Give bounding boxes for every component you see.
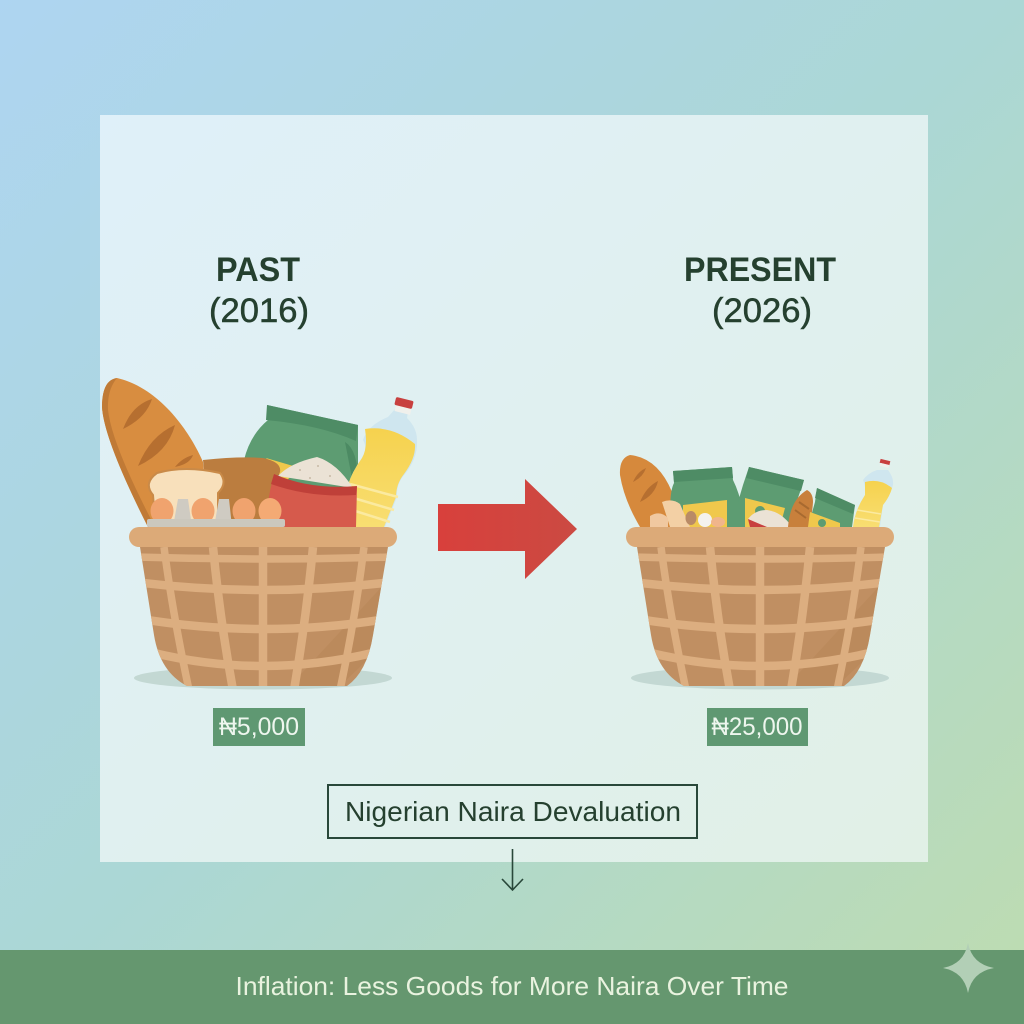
icon: small baguette xyxy=(620,455,676,527)
footer band xyxy=(0,950,1024,1024)
heading: past: (2016) xyxy=(209,292,309,330)
icon: baguette xyxy=(102,378,210,527)
heading: present: PRESENT xyxy=(684,251,836,289)
price badge: past: ₦5,000 xyxy=(219,713,299,741)
callout: naira devaluation xyxy=(328,785,697,838)
icon: bottle xyxy=(348,397,417,527)
icon: green bag one xyxy=(670,467,744,527)
heading: present xyxy=(684,251,836,330)
icon: bread roll xyxy=(788,490,813,527)
icon: basket xyxy=(626,527,894,690)
icon: assorted small items xyxy=(650,500,725,527)
price badge: present: ₦25,000 xyxy=(712,713,802,741)
icon: green bag xyxy=(244,405,358,500)
heading: present: (2026) xyxy=(712,292,812,330)
panel: comparison xyxy=(100,115,928,862)
icon: green bag two xyxy=(738,467,804,527)
footer band: Inflation: Less Goods for More Naira Over Time xyxy=(236,971,788,1001)
icon: small bottle xyxy=(853,459,893,527)
icon: green bag three xyxy=(808,488,855,527)
heading: past: PAST xyxy=(216,251,300,289)
arrow: past to present xyxy=(438,479,577,579)
past basket xyxy=(102,378,417,690)
icon: egg tray xyxy=(147,498,285,527)
icon: rice sack xyxy=(267,457,357,527)
icon: sparkle xyxy=(943,943,994,993)
price badge: present xyxy=(707,708,808,746)
callout: naira devaluation: Nigerian Naira Devaluation xyxy=(345,796,681,827)
icon: bread loaf xyxy=(203,457,280,527)
icon: basket xyxy=(129,527,397,690)
icon: small sack of rice xyxy=(748,510,792,527)
heading: past xyxy=(209,251,309,330)
icon: bread slice xyxy=(149,469,224,520)
present basket xyxy=(620,455,894,690)
price badge: past xyxy=(213,708,305,746)
arrow: down xyxy=(502,849,523,890)
